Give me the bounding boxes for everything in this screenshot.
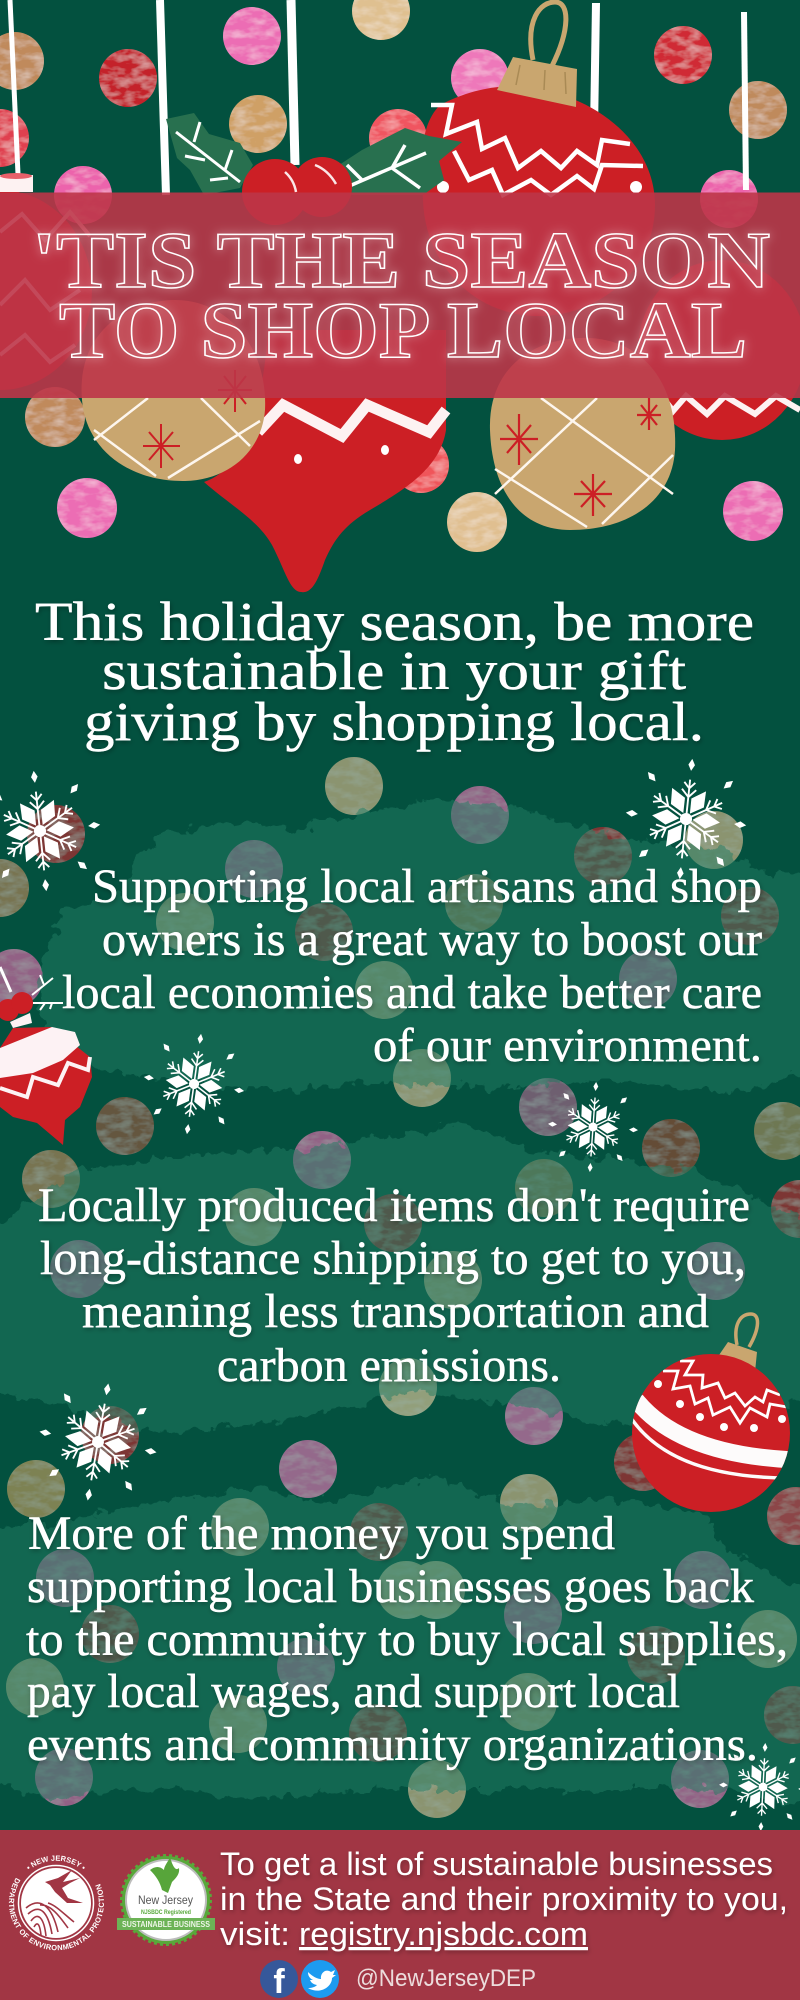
faded dots behind panels	[0, 757, 800, 1818]
text: local artisans: Supporting local artisans and shop	[92, 860, 762, 913]
ornament: right red ball	[631, 1314, 795, 1512]
social handle: @NewJerseyDEP	[356, 1965, 536, 1992]
ornament: left edge red ball	[0, 173, 92, 390]
text: locally produced: Locally produced items don't require	[38, 1179, 750, 1232]
title	[32, 217, 770, 375]
snowflake	[137, 1027, 251, 1141]
icon: facebook	[260, 1960, 298, 2000]
title: TO SHOP LOCAL	[59, 287, 747, 375]
text: locally produced	[38, 1179, 750, 1392]
torn green panels	[0, 800, 800, 1806]
logo: sustainable business badge: New Jersey	[138, 1893, 193, 1907]
footer text: To get a list of sustainable businesses	[220, 1846, 773, 1882]
text: money you spend	[26, 1507, 788, 1771]
snowflake	[620, 753, 752, 885]
logo: department of environmental protection: • NEW JERSEY •	[27, 1856, 85, 1869]
intro text: This holiday season, be more	[35, 591, 754, 652]
text: money you spend: pay local wages, and support local	[27, 1665, 680, 1718]
text: local artisans	[62, 860, 762, 1072]
title banner	[0, 192, 800, 398]
icon: twitter	[301, 1960, 339, 1998]
holly leaves and berries	[166, 113, 462, 225]
snowflake	[717, 1741, 800, 1833]
ornament: big red ball	[422, 2, 655, 316]
text: local artisans: owners is a great way to boost our	[102, 913, 762, 966]
text: money you spend: More of the money you spend	[28, 1507, 615, 1560]
intro text: sustainable in your gift	[102, 640, 686, 701]
logo: department of environmental protection: DEPARTMENT OF ENVIRONMENTAL PROTECTION	[8, 1878, 104, 1950]
ornament: right tan	[490, 338, 675, 530]
ornament: left tan	[82, 300, 265, 481]
ornament: center red drop	[204, 330, 446, 592]
text: locally produced: meaning less transportation and	[82, 1285, 709, 1338]
background dots, top	[0, 0, 787, 552]
icon: facebook: f	[273, 1963, 285, 2000]
footer text: registry.njsbdc.com	[299, 1916, 588, 1952]
text: money you spend: to the community to buy local supplies,	[26, 1613, 788, 1666]
panel: local artisans	[40, 800, 800, 1094]
text: money you spend: events and community organizations.	[27, 1718, 758, 1771]
intro text: giving by shopping local.	[84, 691, 704, 752]
text: local artisans: of our environment.	[373, 1019, 762, 1072]
snowflake	[29, 1373, 167, 1511]
ornament: right red ball	[638, 260, 800, 440]
footer	[0, 1830, 800, 2000]
footer text: visit:	[220, 1916, 290, 1952]
snowflake	[0, 765, 106, 897]
title: 'TIS THE SEASON	[32, 217, 770, 305]
logo: sustainable business badge	[117, 1856, 215, 1944]
intro text	[35, 591, 754, 752]
snowflake	[545, 1079, 641, 1175]
text: local artisans: local economies and take better care	[62, 966, 762, 1019]
logo: sustainable business badge: SUSTAINABLE BUSINESS	[122, 1920, 211, 1929]
text: locally produced: carbon emissions.	[217, 1339, 561, 1392]
ornament: left small	[0, 967, 92, 1145]
text: locally produced: long-distance shipping to get to you,	[40, 1232, 746, 1285]
text: money you spend: supporting local businesses goes back	[27, 1560, 754, 1613]
panel: money you spend	[0, 1474, 800, 1806]
panel: locally produced	[0, 1125, 800, 1433]
hanging strings	[10, 0, 746, 195]
footer text	[220, 1846, 788, 1952]
footer text: in the State and their proximity to you,	[220, 1881, 788, 1917]
logo: sustainable business badge: NJSBDC Registered	[141, 1910, 191, 1916]
